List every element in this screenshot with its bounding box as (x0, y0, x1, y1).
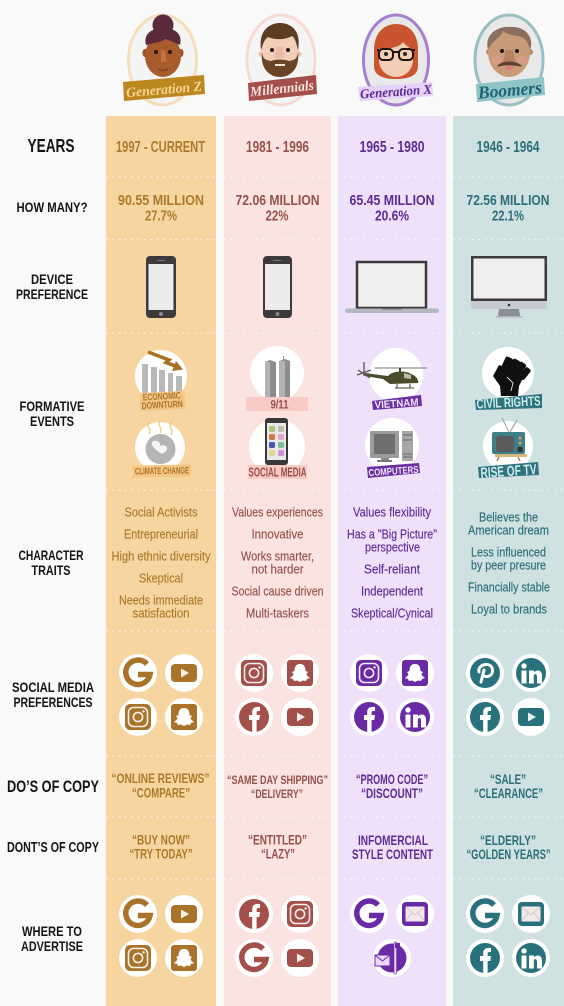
character traits: Boomers: by peer presure (471, 558, 546, 572)
character traits: Generation Z: High ethnic diversity (112, 548, 211, 564)
label: device preference: PREFERENCE (16, 286, 88, 302)
header: Boomers portrait (475, 15, 545, 105)
column: Generation X (338, 116, 446, 1006)
don'ts of copy: “BUY NOW” (132, 832, 190, 848)
row: years: 1946 - 1964 (476, 139, 540, 156)
row: years: 1981 - 1996 (246, 139, 309, 156)
icon: desktop computer (365, 418, 419, 472)
character traits: Millennials: Multi-taskers (246, 606, 309, 620)
label: don'ts of copy: DONT’S OF COPY (7, 840, 99, 856)
social media preferences: Generation Z (119, 654, 203, 736)
don'ts of copy: “LAZY” (261, 846, 295, 862)
don'ts of copy: STYLE CONTENT (352, 846, 433, 862)
character traits: Generation Z: satisfaction (132, 606, 190, 620)
column: Boomers (453, 116, 564, 1006)
label: economic downturn (140, 391, 185, 412)
character traits: Boomers: Less influenced (471, 544, 546, 560)
ribbon: Generation Z: Generation Z (126, 80, 203, 101)
label: where to advertise: WHERE TO (22, 923, 82, 939)
formative events: Generation Z (133, 350, 191, 478)
row: how many: 20.6% (375, 208, 409, 224)
row: years (116, 139, 540, 156)
character traits: Millennials: Social cause driven (232, 584, 324, 598)
ribbon: Boomers: Boomers (476, 77, 543, 103)
label: civil rights: CIVIL RIGHTS (476, 393, 541, 412)
don'ts of copy (130, 832, 550, 862)
icon: climate change (135, 421, 185, 472)
do's of copy: “COMPARE” (132, 784, 190, 800)
icon: economic downturn (135, 350, 187, 402)
ribbon: Generation X: Generation X (360, 81, 433, 101)
character traits: Generation X: Values flexibility (353, 504, 431, 520)
label: character traits: CHARACTER (18, 547, 84, 563)
icon: laptop (345, 262, 439, 313)
character traits: Generation X: perspective (365, 540, 420, 554)
don'ts of copy: “TRY TODAY” (130, 846, 192, 862)
icon: raised fist (482, 347, 534, 399)
icon: smartphone social media (249, 418, 305, 475)
row: how many: 65.45 MILLION (350, 193, 434, 209)
character traits: Millennials: Values experiences (232, 504, 323, 520)
character traits: Generation Z: Social Activists (124, 504, 198, 520)
icon: twin towers (250, 346, 304, 400)
character traits: Boomers: American dream (468, 522, 549, 538)
label: economic downturn: DOWNTURN (141, 399, 183, 412)
row: how many: 22% (266, 208, 289, 224)
do's of copy: “SAME DAY SHIPPING” (227, 773, 328, 787)
character traits: Generation Z: Needs immediate (119, 592, 203, 608)
social media preferences: Boomers (466, 654, 550, 736)
character traits: Boomers (468, 510, 550, 616)
do's of copy (112, 770, 543, 801)
don'ts of copy: “ELDERLY” (480, 832, 536, 848)
icon: desktop monitor (471, 256, 547, 318)
formative events: Millennials (246, 346, 308, 480)
header: Millennials portrait (247, 15, 317, 105)
character traits: Generation X (347, 504, 437, 620)
label: formative events: FORMATIVE (20, 398, 84, 414)
don'ts of copy: “ENTITLED” (248, 832, 307, 848)
character traits: Boomers: Believes the (479, 510, 538, 524)
label: vietnam: VIETNAM (374, 396, 419, 411)
label: device preference (16, 271, 88, 302)
character traits: Generation X: Self-reliant (364, 562, 420, 576)
character traits: Generation X: Independent (361, 584, 423, 598)
ribbon: Millennials: Millennials (248, 79, 315, 100)
label: formative events: EVENTS (30, 413, 74, 429)
label: social media preferences (12, 679, 94, 710)
icon: direct mail mailbox (375, 942, 406, 974)
social media preferences: Generation X (350, 654, 434, 736)
label: social media preferences: PREFERENCES (14, 694, 92, 710)
do's of copy: “SALE” (490, 771, 526, 787)
label: computers: COMPUTERS (368, 465, 419, 479)
row labels (7, 136, 99, 954)
character traits: Millennials: not harder (252, 562, 304, 576)
label: where to advertise (21, 923, 83, 954)
label: where to advertise: ADVERTISE (21, 938, 83, 954)
row: years: 1997 - CURRENT (116, 139, 205, 156)
header: Generation X portrait (358, 15, 433, 105)
label: character traits (18, 547, 84, 578)
row: how many: 72.56 MILLION (466, 193, 550, 209)
character traits: Generation X: Has a "Big Picture" (347, 526, 437, 542)
formative events: Generation X (357, 348, 427, 479)
icon: smartphone Millennials (263, 256, 292, 318)
character traits: Generation X: Skeptical/Cynical (351, 606, 433, 620)
row: how many (118, 193, 550, 224)
column: Millennials (224, 116, 331, 1006)
column: Generation Z (106, 116, 216, 1006)
label: formative events (20, 398, 84, 429)
label: 9/11: 9/11 (270, 398, 289, 412)
character traits: Millennials (232, 504, 324, 620)
do's of copy: “DISCOUNT” (361, 785, 423, 801)
label: climate change: CLIMATE CHANGE (135, 466, 189, 477)
icon: television (483, 418, 533, 471)
do's of copy: “PROMO CODE” (356, 771, 428, 787)
character traits: Generation Z (112, 504, 211, 620)
label: social media: SOCIAL MEDIA (248, 466, 306, 480)
header: Generation Z portrait (123, 14, 205, 105)
character traits: Millennials: Innovative (252, 526, 304, 542)
label: do's of copy: DO’S OF COPY (7, 777, 99, 796)
character traits: Millennials: Works smarter, (241, 548, 314, 564)
label: rise of tv: RISE OF TV (480, 462, 537, 482)
label: device preference: DEVICE (31, 271, 73, 287)
icon: helicopter (357, 348, 427, 402)
where to advertise: Boomers (466, 895, 550, 977)
label: social media preferences: SOCIAL MEDIA (12, 679, 94, 695)
row: how many: 72.06 MILLION (236, 193, 320, 209)
where to advertise: Generation X (350, 895, 434, 977)
do's of copy: “DELIVERY” (251, 787, 303, 801)
character traits: Generation Z: Entrepreneurial (124, 526, 198, 542)
label: years: YEARS (28, 136, 74, 156)
label: how many: HOW MANY? (16, 199, 88, 215)
label: character traits: TRAITS (32, 562, 70, 578)
character traits: Boomers: Loyal to brands (471, 602, 547, 616)
row: years: 1965 - 1980 (360, 139, 425, 156)
label: economic downturn: ECONOMIC (143, 391, 181, 403)
where to advertise: Millennials (235, 895, 319, 977)
row: how many: 90.55 MILLION (118, 193, 204, 209)
formative events: Boomers (475, 347, 542, 482)
where to advertise: Generation Z (119, 895, 203, 977)
don'ts of copy: INFOMERCIAL (358, 832, 428, 848)
row: how many: 27.7% (145, 208, 177, 224)
character traits: Generation Z: Skeptical (139, 570, 183, 586)
social media preferences: Millennials (235, 654, 319, 736)
row: how many: 22.1% (492, 208, 524, 224)
icon: smartphone Generation Z (146, 256, 176, 318)
do's of copy: “ONLINE REVIEWS” (112, 770, 210, 786)
